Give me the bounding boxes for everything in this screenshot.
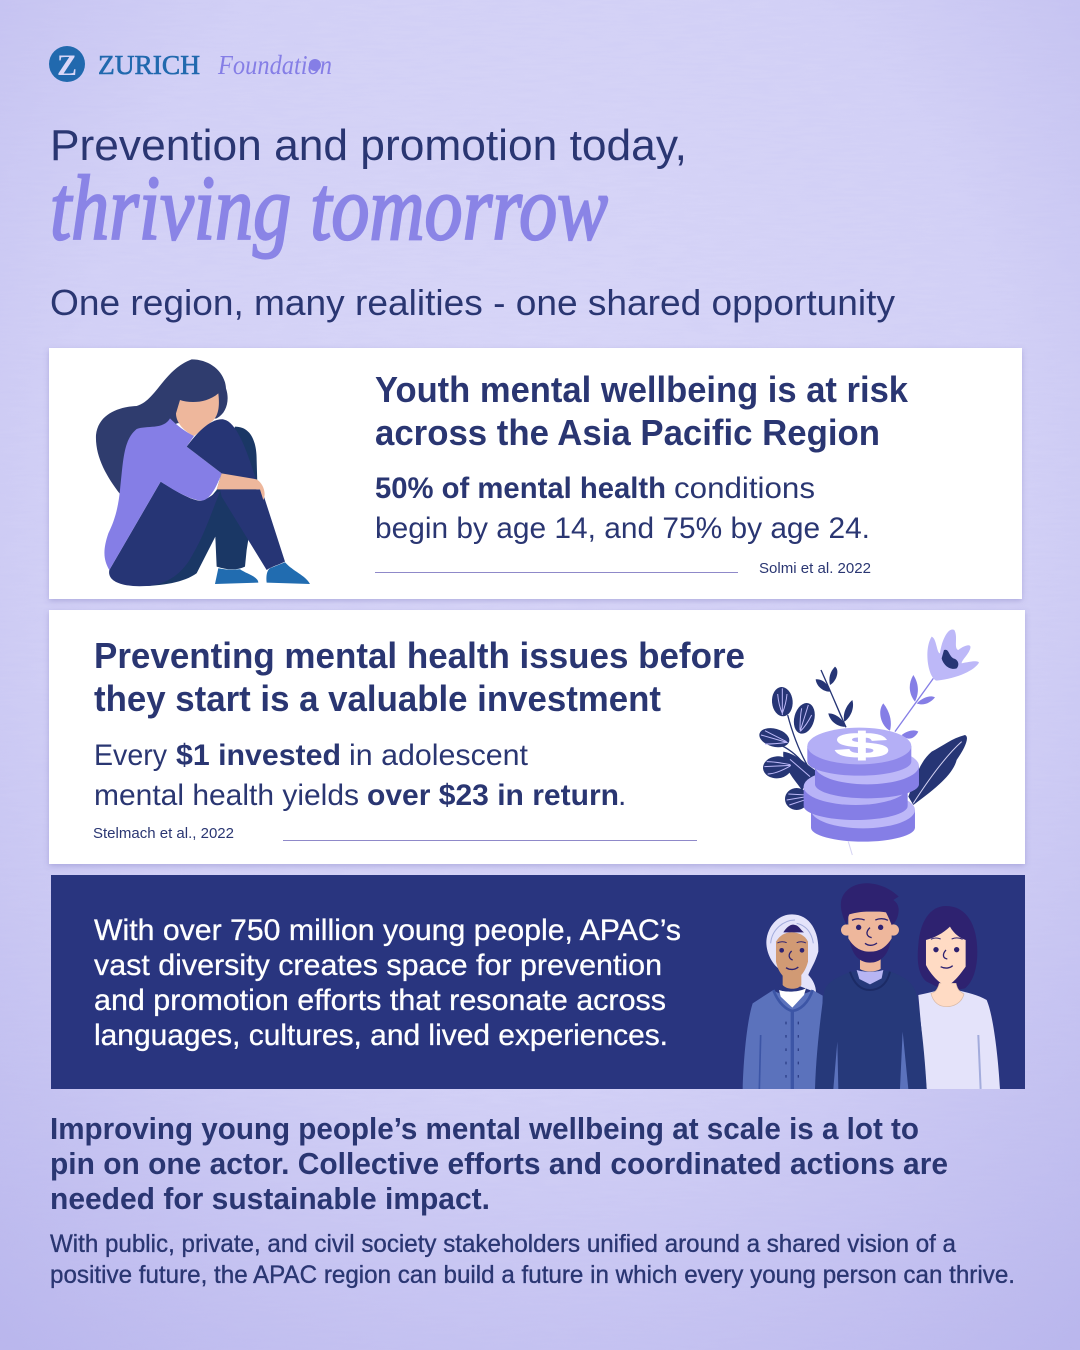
statistic text: 50% of mental health bbox=[375, 472, 666, 505]
closing heading: Improving young people’s mental wellbeing at scale is a lot to bbox=[50, 1111, 919, 1146]
person: centre man bbox=[815, 883, 927, 1089]
script title: thriving tomorrow bbox=[50, 157, 608, 259]
subtitle: One region, many realities - one shared opportunity bbox=[50, 282, 895, 323]
text block: With over 750 million young people, APAC’s bbox=[94, 914, 681, 947]
heading bbox=[375, 369, 909, 453]
logo: Zurich Foundation: Foundation bbox=[217, 50, 332, 80]
heading: Preventing mental health issues before bbox=[94, 635, 745, 676]
heading bbox=[94, 635, 745, 719]
text block: vast diversity creates space for prevention bbox=[94, 949, 662, 982]
logo: Zurich Foundation: Z bbox=[57, 49, 77, 82]
statistic text: begin by age 14, and 75% by age 24. bbox=[375, 512, 870, 545]
logo: Zurich Foundation: ZURICH bbox=[98, 50, 200, 80]
icon: three young people bbox=[743, 883, 1000, 1089]
person: right woman bbox=[918, 906, 1000, 1089]
logo: Zurich Foundation bbox=[49, 46, 332, 82]
icon: coin stack with plants bbox=[757, 629, 979, 855]
person: left woman bbox=[743, 914, 823, 1089]
closing heading: needed for sustainable impact. bbox=[50, 1181, 490, 1216]
coins bbox=[804, 726, 919, 842]
heading: they start is a valuable investment bbox=[94, 678, 661, 719]
statistic text bbox=[375, 472, 870, 545]
closing text: positive future, the APAC region can build a future in which every young person can thrive. bbox=[50, 1261, 1015, 1289]
heading: across the Asia Pacific Region bbox=[375, 412, 880, 453]
closing heading: pin on one actor. Collective efforts and coordinated actions are bbox=[50, 1146, 948, 1181]
statistic text: conditions bbox=[674, 472, 815, 505]
statistic text: mental health yields bbox=[94, 779, 359, 812]
text block: and promotion efforts that resonate across bbox=[94, 984, 666, 1017]
statistic text: Every bbox=[94, 739, 167, 772]
heading: Youth mental wellbeing is at risk bbox=[375, 369, 909, 410]
text block bbox=[94, 914, 681, 1052]
citation: Solmi et al. 2022 bbox=[759, 560, 871, 577]
closing heading bbox=[50, 1111, 948, 1216]
flower bbox=[880, 629, 979, 739]
title line: Prevention and promotion today, bbox=[50, 121, 687, 170]
statistic text: in adolescent bbox=[349, 739, 529, 772]
closing text: With public, private, and civil society stakeholders unified around a shared vision of a bbox=[50, 1230, 956, 1258]
coins: $ bbox=[835, 726, 888, 765]
right leaf bbox=[908, 735, 967, 805]
statistic text: $1 invested bbox=[176, 739, 341, 772]
statistic text: over $23 in return bbox=[367, 779, 619, 812]
panel: APAC diversity bbox=[51, 875, 1025, 1089]
text block: languages, cultures, and lived experiences. bbox=[94, 1019, 668, 1052]
icon: seated woman bbox=[96, 359, 310, 586]
citation: Stelmach et al., 2022 bbox=[93, 825, 234, 842]
left plants bbox=[757, 667, 853, 810]
statistic text: . bbox=[618, 779, 626, 812]
panel: youth risk bbox=[49, 348, 1022, 599]
panel: investment bbox=[49, 610, 1025, 864]
closing text bbox=[50, 1230, 1015, 1289]
statistic text bbox=[94, 739, 626, 812]
